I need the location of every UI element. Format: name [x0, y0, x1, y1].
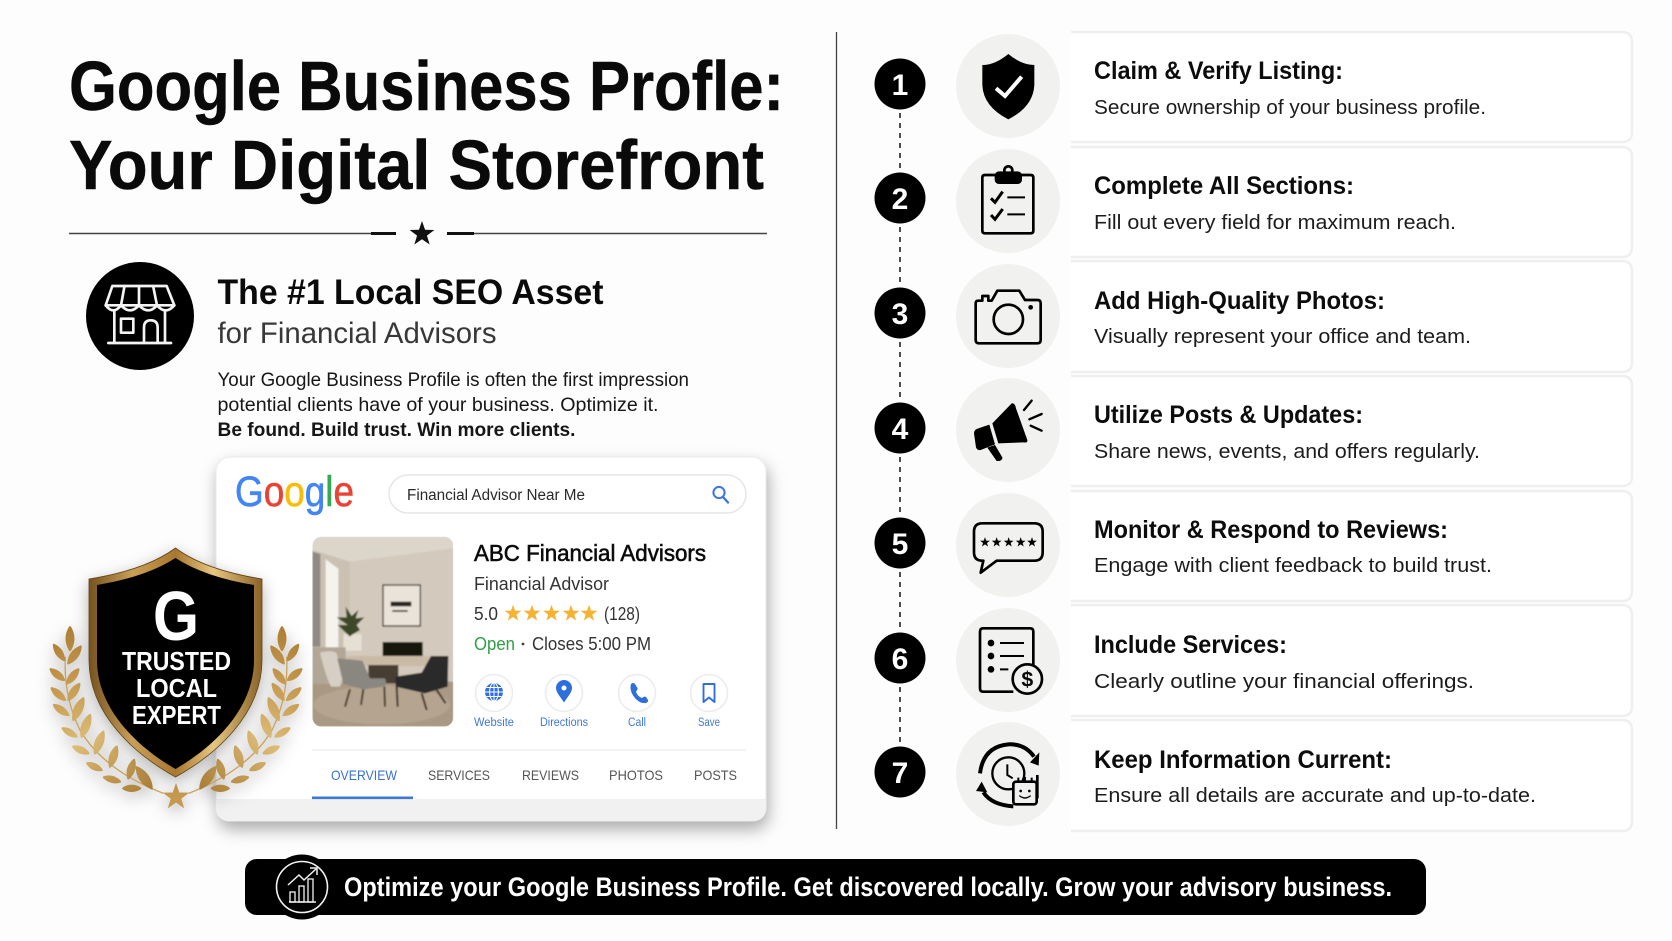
tab row: OVERVIEW	[331, 767, 398, 783]
step 1: claim and verify: 1	[892, 69, 908, 102]
business details: ABC Financial Advisors	[474, 540, 706, 566]
intro text	[218, 369, 689, 441]
tab row: SERVICES	[428, 767, 490, 783]
step 4: posts and updates: 4	[892, 413, 909, 446]
icon: clipboard checklist	[982, 166, 1033, 233]
title divider with star	[69, 221, 767, 245]
step 3: add photos: Add High-Quality Photos:	[1094, 287, 1385, 315]
step 6: include services: Clearly outline your financial offerings.	[1094, 670, 1474, 693]
icon: service list with dollar: $	[1021, 668, 1033, 692]
title: Google Business Profle:	[69, 47, 784, 125]
step 7: keep information current: 7	[892, 757, 908, 790]
icon: camera	[976, 291, 1041, 343]
shield text: TRUSTED	[122, 646, 231, 676]
step 1: claim and verify: Secure ownership of your business profile.	[1094, 96, 1486, 119]
shield text: LOCAL	[136, 673, 217, 703]
shield	[89, 548, 262, 777]
call to action bar	[245, 854, 1426, 920]
action buttons: Website	[474, 717, 514, 729]
step 5: monitor reviews: Monitor & Respond to Reviews:	[1094, 516, 1448, 544]
panel: google search card	[216, 457, 766, 821]
office photo	[312, 537, 453, 727]
icon: shield check	[982, 54, 1034, 119]
title	[69, 47, 784, 204]
search bar	[389, 475, 746, 513]
icon: storefront	[86, 262, 194, 370]
business details: Closes 5:00 PM	[532, 634, 651, 654]
icon: directions pin	[556, 680, 572, 702]
action buttons: Call	[628, 717, 646, 729]
subheading: for Financial Advisors	[218, 317, 496, 350]
shield text: G	[153, 577, 199, 655]
tab row	[312, 750, 746, 799]
step 7: keep information current: Ensure all details are accurate and up-to-date.	[1094, 784, 1536, 807]
rating stars	[505, 605, 597, 621]
intro text: Your Google Business Profile is often the first impression	[218, 369, 689, 391]
shield text: EXPERT	[132, 700, 221, 730]
call to action bar: Optimize your Google Business Profile. Get discovered locally. Grow your advisory business.	[344, 872, 1392, 902]
icon: clock refresh with calendar	[976, 744, 1039, 806]
intro text: potential clients have of your business. Optimize it.	[218, 394, 658, 416]
title: Your Digital Storefront	[69, 126, 764, 204]
business details	[474, 540, 706, 654]
vertical divider	[836, 32, 838, 829]
step 7: keep information current: Keep Information Current:	[1094, 746, 1392, 774]
step 3: add photos: 3	[892, 298, 908, 331]
icon: review speech bubble	[974, 523, 1043, 573]
business details: Open	[474, 634, 515, 654]
icon: service list with dollar	[980, 628, 1042, 694]
action buttons: Directions	[540, 717, 588, 729]
step 2: complete all sections: Complete All Sections:	[1094, 172, 1354, 200]
tab row: POSTS	[694, 767, 737, 783]
icon: growth chart	[276, 862, 328, 912]
step 4: posts and updates: Utilize Posts & Updates:	[1094, 401, 1363, 429]
icon: website globe	[485, 683, 503, 701]
step 5: monitor reviews: 5	[892, 528, 908, 561]
step 1: claim and verify	[874, 32, 1632, 142]
search bar: Financial Advisor Near Me	[407, 487, 585, 504]
step 3: add photos	[874, 261, 1632, 372]
tab row: REVIEWS	[522, 767, 579, 783]
step 5: monitor reviews	[874, 491, 1632, 601]
icon: phone	[630, 683, 648, 703]
step 2: complete all sections	[874, 147, 1632, 257]
dashed timeline	[899, 113, 901, 744]
step 6: include services: 6	[892, 643, 908, 676]
google logo: Google	[235, 468, 354, 516]
action buttons	[474, 674, 728, 729]
step 6: include services: Include Services:	[1094, 631, 1287, 659]
tab row: PHOTOS	[609, 767, 663, 783]
action buttons: Save	[698, 717, 720, 729]
subheading	[218, 273, 604, 350]
step 5: monitor reviews: Engage with client feedback to build trust.	[1094, 554, 1492, 577]
step 7: keep information current	[874, 720, 1632, 831]
subheading: The #1 Local SEO Asset	[218, 273, 604, 312]
step 2: complete all sections: Fill out every field for maximum reach.	[1094, 211, 1456, 234]
icon: megaphone	[974, 401, 1042, 461]
laurel wreath	[51, 627, 301, 808]
badge: trusted local expert	[51, 548, 301, 808]
step 2: complete all sections: 2	[892, 183, 908, 216]
step 4: posts and updates: Share news, events, and offers regularly.	[1094, 440, 1480, 463]
shield text	[122, 577, 231, 730]
business details: (128)	[604, 604, 640, 624]
icon: bookmark	[704, 684, 714, 702]
step 3: add photos: Visually represent your office and team.	[1094, 325, 1471, 348]
step 6: include services	[874, 605, 1632, 716]
business details: 5.0	[474, 604, 498, 624]
business details: Financial Advisor	[474, 574, 609, 594]
step 4: posts and updates	[874, 376, 1632, 486]
step 1: claim and verify: Claim & Verify Listing:	[1094, 57, 1343, 85]
intro text: Be found. Build trust. Win more clients.	[218, 419, 576, 441]
